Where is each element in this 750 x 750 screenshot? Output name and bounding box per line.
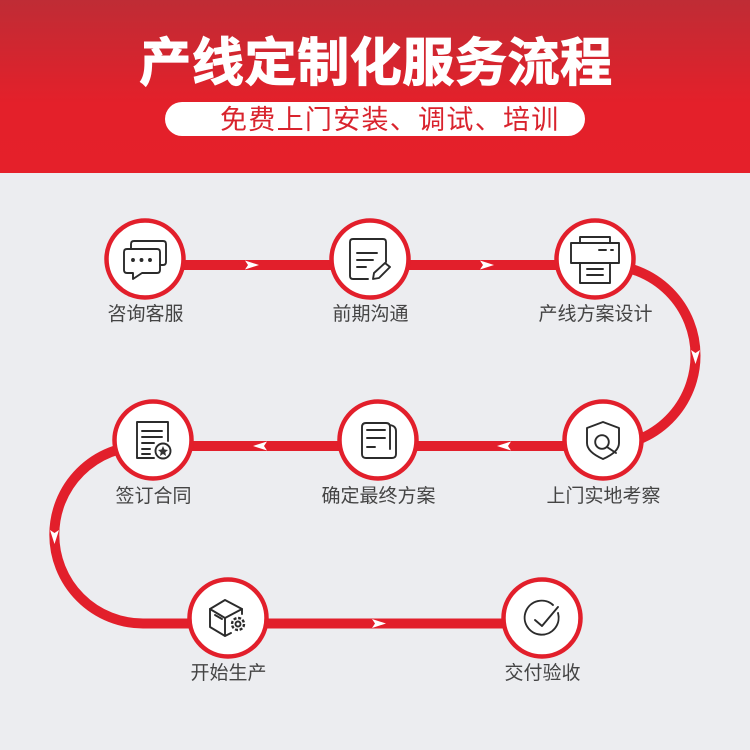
title: 产线定制化服务流程 — [139, 35, 613, 93]
step 7: start production: 开始生产 — [190, 662, 267, 684]
icon: documents — [362, 423, 396, 458]
step 8: delivery acceptance — [504, 580, 581, 684]
process path — [54, 265, 696, 624]
arrows on path — [50, 260, 700, 628]
icon: shield with magnifier — [587, 422, 619, 459]
step 3: line design — [538, 220, 653, 325]
step 4: site survey: 上门实地考察 — [546, 485, 661, 507]
header banner — [0, 0, 750, 173]
icon: chat bubbles — [124, 241, 166, 279]
step 2: early communication: 前期沟通 — [332, 303, 409, 325]
step 4: site survey — [546, 402, 661, 507]
step 3: line design: 产线方案设计 — [538, 303, 653, 325]
step 6: sign contract — [114, 402, 192, 507]
step 5: confirm plan: 确定最终方案 — [321, 485, 436, 507]
step 5: confirm plan — [321, 402, 436, 507]
step 1: consult — [106, 220, 184, 325]
step 7: start production — [190, 580, 267, 684]
step 2: early communication — [332, 220, 409, 325]
step 1: consult: 咨询客服 — [107, 303, 184, 325]
step 6: sign contract: 签订合同 — [115, 485, 192, 507]
icon: box with gear — [210, 600, 244, 636]
step 8: delivery acceptance: 交付验收 — [504, 662, 581, 684]
icon: check circle — [525, 601, 559, 635]
icon: document with pencil — [350, 239, 390, 279]
icon: contract with star badge — [137, 422, 170, 458]
icon: printer — [571, 237, 619, 283]
subtitle pill: 免费上门安装、调试、培训 — [220, 105, 560, 135]
